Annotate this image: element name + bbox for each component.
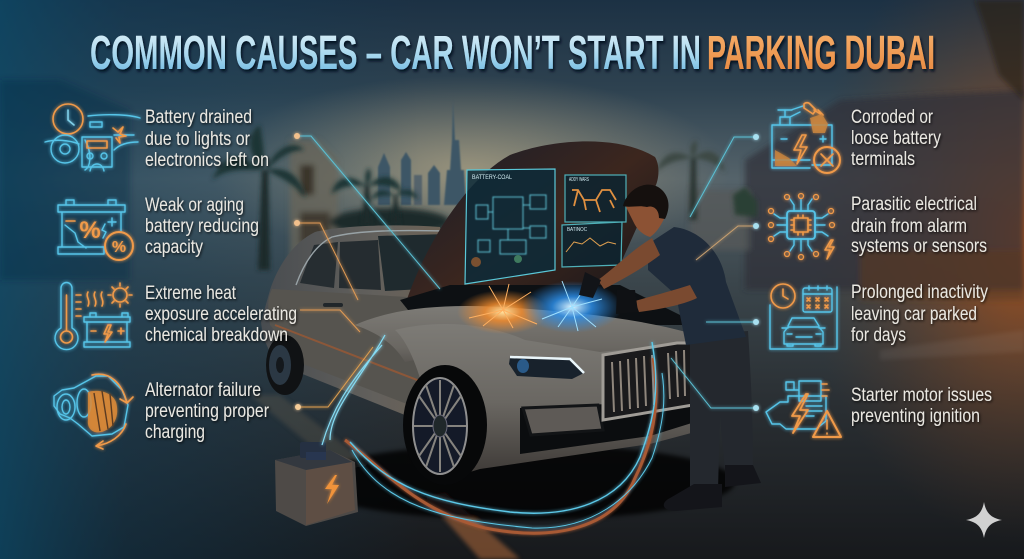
holographic panels	[465, 169, 626, 284]
icon: weak battery with percent: %	[79, 217, 101, 244]
car: bumper slot	[523, 405, 603, 435]
car: raised hood	[405, 141, 658, 327]
text: weak battery: Weak or aging	[145, 195, 244, 216]
road marking and light streaks	[250, 330, 1024, 559]
panel: circuit	[565, 175, 626, 222]
mechanic: arms	[579, 238, 697, 314]
background: palm trees	[212, 0, 1024, 270]
text: parasitic drain: drain from alarm	[851, 216, 967, 237]
text: prolonged inactivity: for days	[851, 325, 906, 346]
text: corroded terminals	[851, 107, 941, 170]
car: front wheel	[403, 365, 487, 485]
text: alternator failure	[145, 380, 270, 443]
text: weak battery	[145, 195, 259, 258]
text: alternator failure: Alternator failure	[145, 380, 261, 401]
car: headlight	[509, 357, 584, 379]
jump cables	[322, 335, 664, 533]
icon: microchip	[768, 194, 834, 260]
icon: starter motor with warning	[766, 381, 841, 437]
text: extreme heat: Extreme heat	[145, 283, 237, 304]
car: rear body and cabin	[261, 225, 450, 427]
icon: weak battery with percent: %	[112, 239, 126, 256]
mechanic: boots	[664, 465, 761, 511]
text: battery drained	[145, 107, 269, 171]
text: battery drained: due to lights or	[145, 129, 251, 150]
background: buildings	[0, 80, 1024, 300]
car: front body and bumper	[395, 324, 695, 481]
text: alternator failure: charging	[145, 422, 205, 443]
panel: battery diagnostics	[465, 169, 555, 284]
text: parasitic drain	[851, 194, 987, 257]
text: starter motor: Starter motor issues	[851, 385, 992, 406]
text: parasitic drain: Parasitic electrical	[851, 194, 977, 215]
jump starter pack	[275, 442, 358, 526]
car: front hood and fender	[355, 306, 695, 390]
text: corroded terminals: terminals	[851, 149, 915, 170]
mechanic: legs	[690, 331, 753, 490]
mechanic	[579, 185, 761, 511]
text: battery drained: Battery drained	[145, 107, 252, 128]
text: extreme heat: chemical breakdown	[145, 325, 288, 346]
car	[261, 141, 700, 485]
sparks over the engine	[457, 281, 622, 334]
icon: dashboard with clock	[45, 104, 140, 171]
panel: battery diagnostics: BATTERY-COAL	[472, 175, 513, 181]
car: lower grille	[520, 387, 695, 454]
text: parasitic drain: systems or sensors	[851, 236, 987, 257]
icon: alternator	[54, 374, 133, 449]
text: starter motor	[851, 385, 992, 427]
car: engine bay	[400, 285, 700, 325]
text: extreme heat: exposure accelerating	[145, 304, 297, 325]
icon: corroded battery terminals	[772, 103, 840, 173]
car: rear wheel	[266, 335, 304, 395]
text: starter motor: preventing ignition	[851, 406, 980, 427]
text: weak battery: capacity	[145, 237, 203, 258]
panel: circuit: ADDY WARS	[569, 177, 589, 183]
text: prolonged inactivity	[851, 282, 988, 346]
icon: calendar, clock and parked car	[770, 284, 837, 349]
text: corroded terminals: Corroded or	[851, 107, 934, 128]
car: chrome grille	[603, 343, 693, 420]
icon: thermometer, sun and battery	[55, 283, 132, 350]
mechanic: head	[623, 185, 668, 237]
icon: weak battery with percent	[58, 200, 133, 260]
panel: chart: BATINOC	[567, 227, 587, 233]
text: corroded terminals: loose battery	[851, 128, 941, 149]
text: battery drained: electronics left on	[145, 150, 269, 171]
icon: sparkle watermark	[966, 502, 1002, 538]
mechanic: torso	[648, 227, 746, 345]
text: prolonged inactivity: leaving car parked	[851, 304, 977, 325]
callout leader lines	[294, 133, 759, 411]
panel: chart	[562, 222, 622, 267]
text: alternator failure: preventing proper	[145, 401, 270, 422]
text: prolonged inactivity: Prolonged inactivity	[851, 282, 988, 303]
text: extreme heat	[145, 283, 297, 346]
background: Dubai skyline	[378, 100, 466, 205]
text: weak battery: battery reducing	[145, 216, 259, 237]
